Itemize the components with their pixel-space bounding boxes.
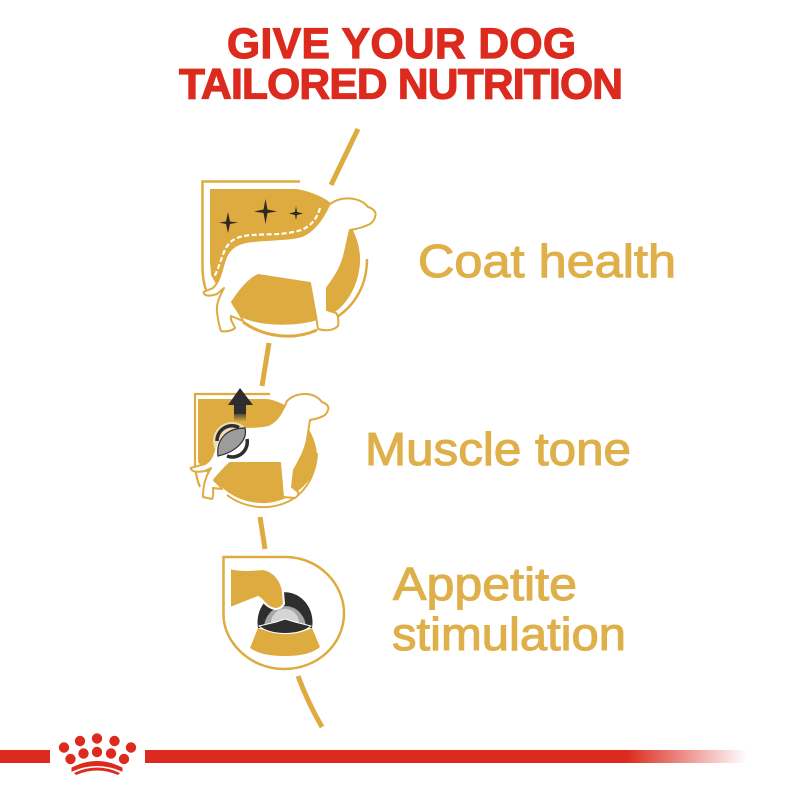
connector line: bottom: [298, 676, 322, 727]
dog silhouette: [190, 394, 328, 499]
label: appetite stimulation: [392, 558, 626, 660]
title: GIVE YOUR DOG: [227, 21, 576, 68]
connector line: third: [260, 517, 265, 549]
footer bar: left: [0, 750, 50, 763]
label: coat health: Coat health: [418, 235, 676, 287]
bowl: [250, 628, 320, 656]
label: muscle tone: Muscle tone: [365, 423, 631, 475]
icon: appetite bowl: [224, 557, 344, 669]
title: TAILORED NUTRITION: [179, 62, 623, 108]
icon: muscle tone dog: [190, 388, 328, 507]
label: appetite stimulation: Appetite: [393, 558, 577, 610]
icon: up arrow: [228, 388, 253, 421]
connector line: top: [331, 129, 358, 185]
label: appetite stimulation: stimulation: [392, 608, 626, 660]
icon: coat health dog: [202, 182, 376, 336]
icon: muscle: [213, 422, 251, 460]
connector line: second: [262, 343, 269, 386]
icon: royal crown logo: [59, 733, 136, 775]
title: [179, 21, 623, 108]
food dish backdrop: [258, 592, 312, 628]
dog silhouette: [204, 198, 376, 331]
icon: sparkles: [219, 199, 303, 233]
dashed coat line: [214, 208, 320, 277]
footer bar: right: [145, 750, 747, 763]
dog muzzle: [230, 568, 284, 609]
